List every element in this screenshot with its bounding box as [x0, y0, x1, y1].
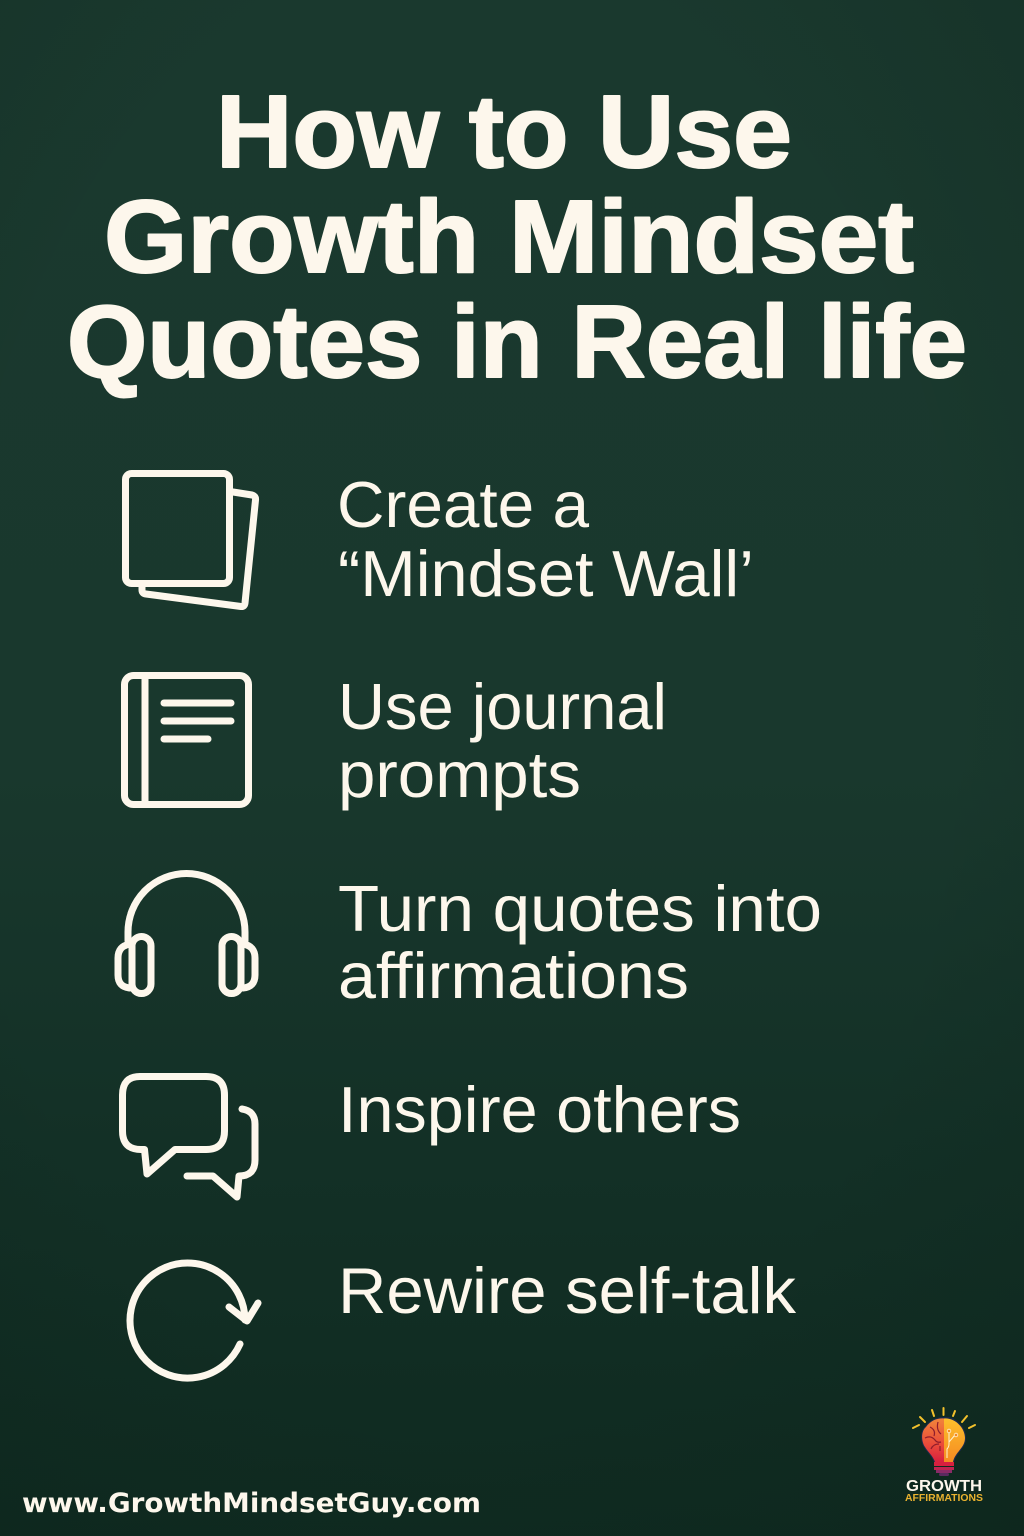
text: create a mindset wall: “Mindset Wall’: [338, 537, 754, 610]
title: Quotes in Real life: [67, 284, 967, 399]
text: use journal prompts: Use journal: [338, 670, 667, 743]
icon: light bulb with brain: [913, 1408, 975, 1476]
logo: growth affirmations: [905, 1408, 983, 1504]
title: How to Use: [216, 74, 792, 189]
text: create a mindset wall: [337, 468, 754, 610]
text: create a mindset wall: Create a: [337, 468, 590, 541]
text: rewire self-talk: Rewire self-talk: [338, 1254, 797, 1327]
icon: speech bubbles: [122, 1076, 255, 1197]
logo wordmark: GROWTH: [906, 1478, 982, 1495]
text: use journal prompts: prompts: [338, 738, 581, 811]
logo: growth affirmations: AFFIRMATIONS: [905, 1493, 983, 1504]
text: use journal prompts: [338, 670, 667, 811]
icon: headphones: [118, 874, 255, 994]
text: turn quotes into affirmations: affirmations: [338, 939, 689, 1012]
title: [67, 74, 967, 399]
text: inspire others: Inspire others: [338, 1073, 741, 1146]
text: turn quotes into affirmations: Turn quotes into: [338, 872, 822, 945]
text: turn quotes into affirmations: [338, 872, 822, 1012]
icon: journal: [124, 676, 248, 804]
icon: refresh arrow: [130, 1263, 258, 1378]
footer url: www.GrowthMindsetGuy.com: [22, 1488, 481, 1519]
icon: sticky notes: [126, 474, 256, 607]
title: Growth Mindset: [104, 179, 914, 294]
